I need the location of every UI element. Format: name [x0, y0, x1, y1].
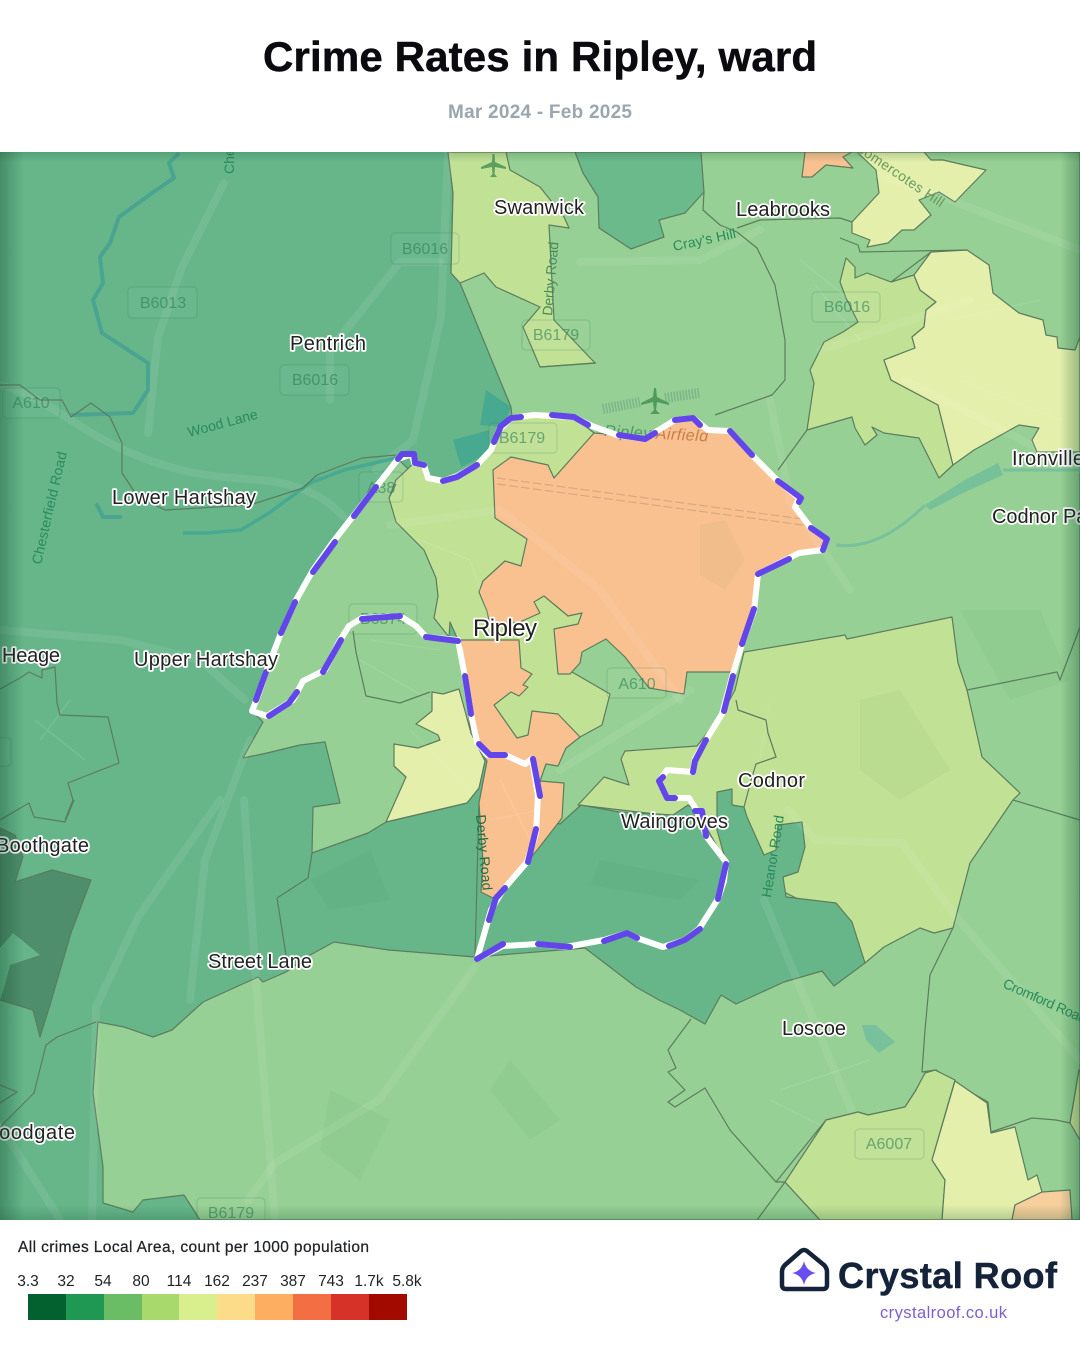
- region: pale strip at east edge: [1070, 1070, 1080, 1140]
- region: pale Ripley west: [386, 689, 485, 822]
- road names: Heanor Road: [758, 814, 787, 898]
- road names: Somercotes Hill: [853, 139, 948, 210]
- map edge vignette: [0, 152, 1080, 1220]
- road badges: A38: [367, 480, 395, 497]
- road badges: B6013: [140, 295, 186, 312]
- subtitle: date range: Mar 2024 - Feb 2025: [448, 102, 632, 123]
- legend scale values: 743: [318, 1273, 344, 1290]
- place labels: Ripley: [473, 615, 537, 642]
- region: wedge inside Boothgate: [0, 933, 40, 1000]
- road badges: B6016: [292, 372, 338, 389]
- region: large light green Codnor area: [578, 617, 1020, 963]
- region: light green Ripley north and centre: [388, 418, 611, 738]
- place labels: Pentrich: [290, 333, 366, 355]
- road names: [28, 139, 1080, 1026]
- road badges: [0, 233, 924, 1228]
- region: mid-green Hartshay: [243, 459, 479, 853]
- legend scale values: 162: [204, 1273, 230, 1290]
- road badges: B6374: [360, 611, 406, 628]
- place labels: Loscoe: [782, 1018, 846, 1040]
- region: dark green south of Waingroves: [475, 789, 865, 1024]
- woodland shading: [700, 520, 744, 590]
- place labels: Heage: [2, 645, 60, 667]
- region: very dark green Boothgate: [0, 828, 91, 1037]
- place labels: [0, 197, 1080, 1144]
- place labels: Street Lane: [208, 951, 312, 973]
- wordmark: Crystal Roof: [838, 1255, 1058, 1296]
- street grid: [35, 260, 1040, 1126]
- water: ponds and canal: [71, 153, 1080, 1053]
- runway hatch: [603, 393, 699, 409]
- legend scale values: 237: [242, 1273, 268, 1290]
- region: pale south-east area: [932, 1081, 1042, 1220]
- logo: Crystal Roof: [782, 1250, 1058, 1322]
- region: mid-green north, east and south areas: [93, 152, 1080, 1220]
- legend scale values: [17, 1273, 422, 1290]
- base: low-crime dark green area: [0, 152, 512, 1220]
- region: dark green north of Leabrooks: [575, 152, 704, 249]
- legend scale values: 114: [167, 1273, 192, 1290]
- road badges: A610: [618, 676, 656, 693]
- road badges: B6179: [499, 430, 545, 447]
- legend scale values: 1.7k: [354, 1273, 384, 1290]
- place labels: Waingroves: [621, 811, 728, 833]
- legend scale values: 3.3: [17, 1273, 39, 1290]
- legend: [17, 1239, 422, 1320]
- road badges: B6016: [402, 241, 448, 258]
- region: peach south-east corner: [1012, 1190, 1072, 1220]
- place labels: Upper Hartshay: [134, 649, 278, 671]
- road badges: A6007: [866, 1136, 912, 1153]
- road badges: A610: [12, 395, 50, 412]
- region: pale Ironville area: [884, 250, 1080, 465]
- place labels: Codnor: [738, 770, 805, 792]
- road badges: B6179: [208, 1205, 254, 1222]
- region: orange patch at top edge: [802, 152, 853, 177]
- legend scale values: 54: [94, 1273, 112, 1290]
- region: orange high-crime north Ripley: [479, 418, 827, 694]
- boundary white casing: [252, 415, 827, 959]
- ward boundary lines: [0, 192, 1080, 1220]
- road names: Derby Road: [473, 814, 496, 891]
- place labels: Lower Hartshay: [112, 487, 256, 509]
- icon: airplane Ripley Airfield: [641, 388, 669, 414]
- road names: Ripley Airfield: [604, 423, 710, 445]
- region: pale Somercotes area: [852, 152, 986, 247]
- road network: [0, 152, 1080, 1220]
- road badges: B6016: [824, 299, 870, 316]
- place labels: Swanwick: [494, 197, 585, 219]
- region: Swanwick light green: [448, 152, 595, 367]
- road names: Derby Road: [539, 241, 561, 316]
- railway dashed line: [497, 478, 810, 526]
- legend scale values: 80: [132, 1273, 150, 1290]
- region: light green east of Cray's Hill: [807, 258, 953, 478]
- road names: Che: [221, 148, 237, 174]
- legend title: All crimes Local Area, count per 1000 population: [18, 1239, 369, 1256]
- icon: house with star: [782, 1250, 827, 1289]
- legend scale values: 32: [57, 1273, 75, 1290]
- website link: crystalroof.co.uk: [880, 1304, 1008, 1322]
- road badges: B6179: [533, 327, 579, 344]
- place labels: Leabrooks: [736, 199, 830, 221]
- icon: airplane Swanwick: [481, 154, 506, 177]
- region: light green A6007 area: [785, 1070, 955, 1220]
- region: orange high-crime south Ripley: [461, 640, 580, 898]
- title: Crime Rates in Ripley, ward: [263, 33, 817, 80]
- highlighted ward boundary: Ripley: [252, 415, 827, 959]
- road names: Wood Lane: [186, 406, 260, 440]
- legend scale values: 5.8k: [392, 1273, 422, 1290]
- legend colour bar: [28, 1294, 407, 1320]
- road names: Chesterfield Road: [28, 450, 70, 566]
- legend scale values: 387: [280, 1273, 306, 1290]
- boundary purple dashes: [256, 415, 827, 959]
- road names: Cray's Hill: [671, 225, 737, 254]
